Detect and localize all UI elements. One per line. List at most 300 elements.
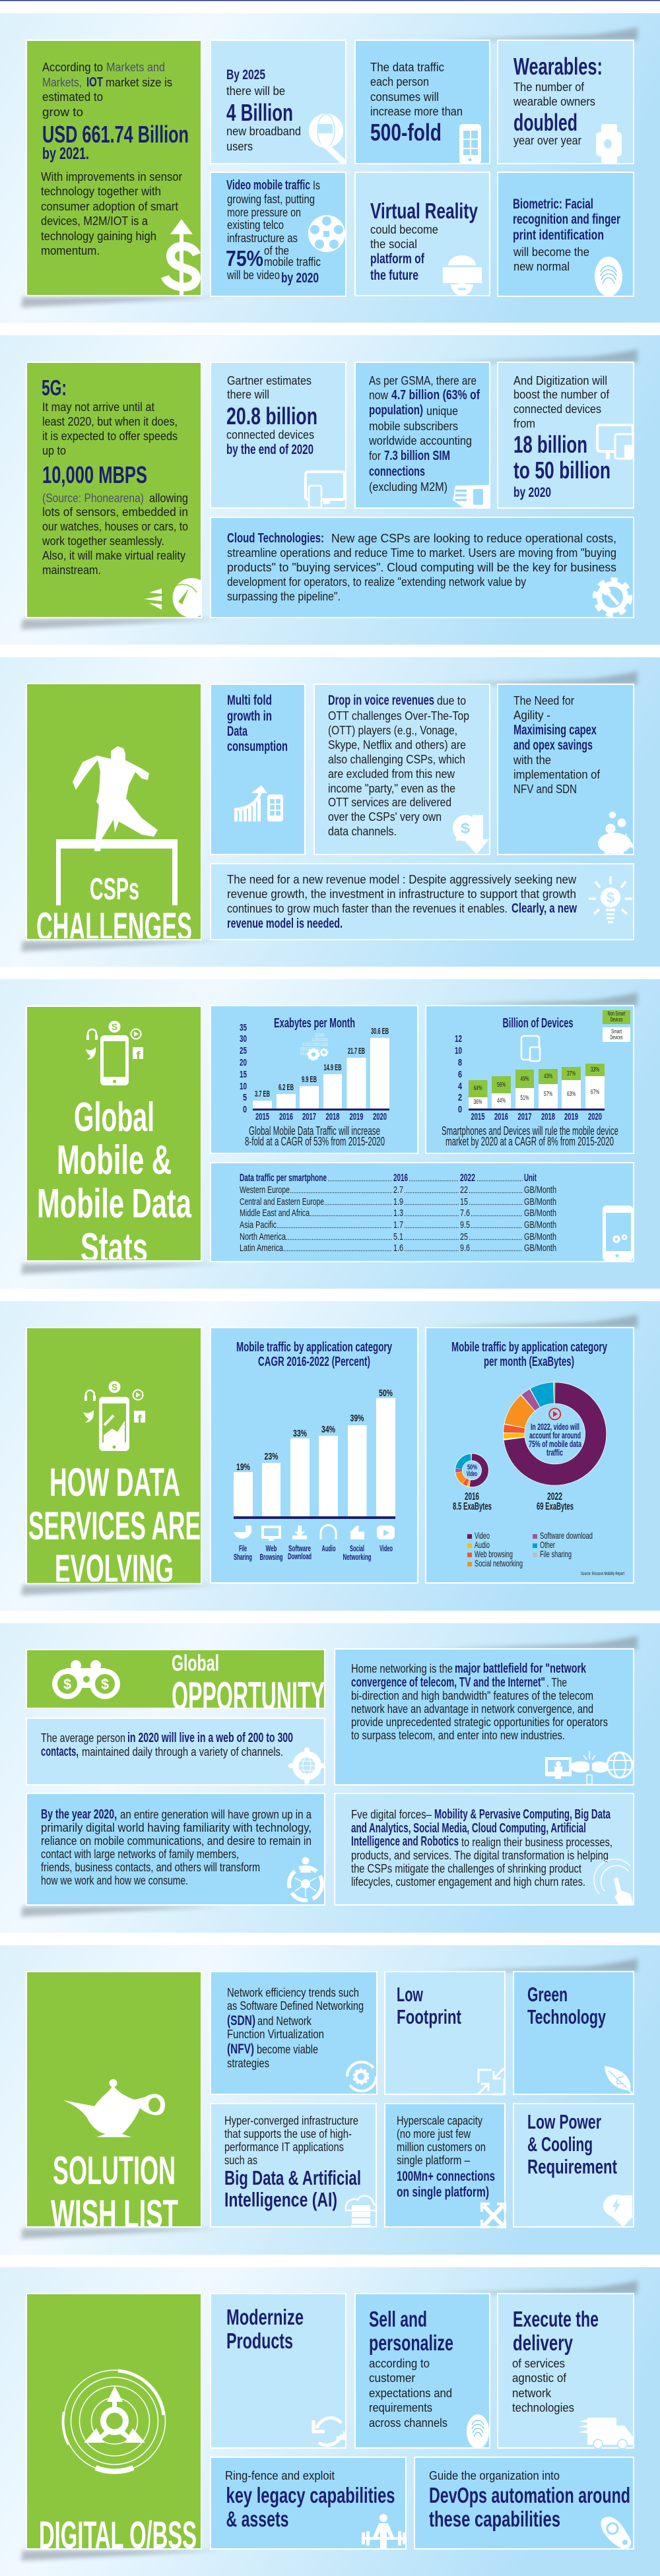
text: hyper-converged: Big Data & Artificial: [224, 2166, 361, 2189]
text: contacts: in 2020 will live in a web of 200 to 300: [127, 1731, 293, 1745]
chart: CAGR bars: 50%: [379, 1388, 393, 1399]
chart: 2016 donut: 50%: [467, 1464, 477, 1471]
icon: power down: [603, 2195, 634, 2227]
text: hyper-converged: performance IT applications: [224, 2141, 344, 2154]
text: contacts: [41, 1731, 293, 1759]
chart: devices stacked bars: 37%: [567, 1070, 576, 1078]
text: hyper-converged: [224, 2114, 361, 2211]
text: digitization: from: [513, 417, 535, 430]
text: Gartner: 20.8 billion: [226, 402, 317, 430]
panel: digitization: [498, 362, 634, 508]
text: digital forces: Fve digital forces–: [351, 1808, 432, 1821]
title: global mobile and mobile data stats: Mobile Data: [37, 1181, 191, 1227]
chart: devices stacked bars: 2017: [517, 1111, 532, 1122]
text: 5G: our watches, houses or cars, to: [42, 520, 188, 533]
text: digitization: to 50 billion: [513, 457, 610, 484]
text: agility: [513, 694, 601, 796]
text: donut labels: 69 ExaBytes: [537, 1501, 574, 1512]
text: digital forces: Intelligence and Robotics: [351, 1834, 459, 1849]
text: IoT market size: market size is: [106, 76, 172, 89]
text: data consumption: consumption: [227, 739, 288, 754]
table: data traffic per smartphone: [240, 1173, 556, 1254]
table: data traffic per smartphone: GB/Month: [524, 1196, 556, 1208]
panel: home networking: [335, 1649, 634, 1785]
text: agility: implementation of: [513, 768, 601, 781]
panel: hyperscale capacity: [385, 2104, 505, 2227]
text: devops: these capabilities: [429, 2507, 560, 2531]
chart: devices stacked bars: 64%: [474, 1085, 482, 1092]
text: GSMA: mobile subscribers: [369, 420, 458, 433]
text: digital forces: products, and services. The digital transformation is helping: [351, 1849, 609, 1862]
text: low power: Low Power: [527, 2110, 601, 2133]
panel: digital O/BSS title: [26, 2294, 201, 2557]
text: voice revenues: also challenging CSPs, which: [328, 753, 465, 766]
chart: devices stacked bars: 63%: [567, 1091, 576, 1098]
chart: exabytes bars: 2017: [302, 1111, 316, 1122]
chart: 2022 donut: account for around: [529, 1430, 581, 1440]
icon: delivery truck: [579, 2418, 634, 2449]
table: data traffic per smartphone: 2016: [393, 1173, 408, 1184]
legend: device types: Non Smart: [607, 1010, 626, 1017]
table: data traffic per smartphone: 9.5: [460, 1219, 470, 1231]
text: generation: [41, 1807, 312, 1887]
text: home networking: to surpass telecom, and enter into new industries.: [351, 1729, 565, 1742]
chart: CAGR bars: 33%: [293, 1428, 307, 1439]
text: revenue model: [227, 873, 577, 931]
text: data traffic: [370, 61, 463, 146]
text: category labels: Download: [288, 1551, 312, 1561]
text: network efficiency: as Software Defined Networking: [227, 1999, 364, 2012]
panel: GSMA subscribers: [355, 362, 490, 508]
text: CAGR chart title: CAGR 2016-2022 (Percent): [258, 1355, 370, 1369]
text: GSMA: 7.3 billion SIM: [384, 449, 450, 463]
text: GSMA: As per GSMA, there are: [369, 374, 477, 387]
title: how data services are evolving: [29, 1467, 200, 1582]
icon: binary gears: 11001100: [312, 1038, 328, 1043]
text: exabytes caption: Global Mobile Data Traffic will increase: [249, 1124, 380, 1138]
text: biometric: new normal: [513, 260, 570, 273]
icon: dollar with arrow: [165, 219, 197, 296]
text: GSMA: worldwide accounting: [368, 434, 472, 447]
text: generation: friends, business contacts, and others will transform: [41, 1861, 260, 1874]
legend: application categories: Video: [475, 1530, 490, 1541]
chart: devices stacked bars: 6: [458, 1069, 462, 1080]
text: video traffic: infrastructure as: [227, 232, 298, 245]
text: video traffic: 75%: [226, 246, 263, 271]
text: cloud technologies: surpassing the pipeline".: [227, 590, 341, 603]
text: biometric: Biometric: Facial: [513, 197, 593, 212]
text: voice revenues: Drop in voice revenues: [328, 693, 434, 708]
panel: exabytes per month: [211, 1006, 418, 1153]
text: revenue model: revenue model is needed.: [227, 917, 343, 931]
text: low footprint: Low: [397, 1983, 424, 2006]
text: hyperscale: single platform –: [397, 2154, 470, 2167]
text: IoT market size: USD 661.74 Billion: [42, 121, 189, 148]
table: data traffic per smartphone: Western Europe: [240, 1184, 290, 1196]
table: data traffic per smartphone: 1.7: [393, 1219, 403, 1231]
text: voice revenues: [328, 693, 469, 838]
table: data traffic per smartphone: GB/Month: [524, 1208, 556, 1219]
text: virtual reality: the future: [370, 268, 418, 283]
text: category labels: Web: [265, 1543, 277, 1553]
text: GSMA: (excluding M2M): [369, 480, 447, 494]
text: virtual reality: the social: [370, 238, 417, 251]
icon: devices: [597, 425, 633, 459]
text: category labels: Social: [350, 1543, 364, 1553]
panel: hyper-converged infrastructure: [211, 2104, 376, 2227]
table: data traffic per smartphone: 1.9: [393, 1196, 403, 1208]
text: voice revenues: Skype, Netflix and others) are: [328, 738, 466, 752]
text: exabytes caption: [245, 1124, 385, 1148]
text: category labels: File: [239, 1543, 247, 1553]
text: video traffic: growing fast, putting: [227, 193, 315, 206]
panel: new revenue model: [211, 864, 634, 940]
text: IoT market size: Markets,: [42, 76, 82, 89]
text: generation: an entire generation will have grown up in a: [120, 1808, 312, 1821]
text: IoT market size: estimated to: [42, 90, 103, 104]
title: global mobile and mobile data stats: Global: [74, 1095, 154, 1140]
text: legacy capabilities: [225, 2469, 395, 2531]
icon: expand arrows: [482, 2204, 505, 2227]
chart: CAGR bars: 19%: [236, 1462, 250, 1473]
text: IoT market size: grow to: [42, 106, 83, 119]
panel: Gartner estimates: [211, 362, 346, 508]
text: video traffic: of the: [264, 244, 289, 257]
text: digital forces: the CSPs mitigate the challenges of shrinking product: [351, 1862, 581, 1875]
title: solution wish list: WISH LIST: [51, 2192, 178, 2236]
text: 5G: 5G:: [42, 375, 67, 400]
text: biometric: [513, 197, 620, 273]
panel: solution wish list title: [26, 1972, 201, 2236]
chart: CAGR bars: 34%: [321, 1424, 335, 1435]
text: wearables: Wearables:: [513, 53, 603, 80]
panel: sell and personalize: [355, 2294, 490, 2449]
icon: binary gears: 0001000101: [300, 1047, 320, 1052]
table: data traffic per smartphone: 15: [460, 1196, 468, 1208]
text: IoT market size: momentum.: [41, 244, 100, 257]
legend: device types: Smart: [611, 1028, 622, 1035]
chart: exabytes bars: 0: [243, 1104, 247, 1115]
panel: need for agility: [498, 684, 634, 854]
text: data consumption: Data: [227, 724, 248, 739]
icon: binary gears: 11001: [315, 1033, 325, 1038]
table: data traffic per smartphone: 5.1: [393, 1231, 403, 1242]
icon: compress arrows: [478, 2068, 504, 2094]
icon: smart watch: [596, 124, 622, 164]
panel: legacy capabilities: [211, 2457, 406, 2549]
chart: devices stacked bars: 8: [458, 1057, 462, 1068]
icon: speedometer: [144, 578, 201, 618]
text: biometric: print identification: [513, 228, 604, 243]
chart: devices stacked bars: 56%: [497, 1081, 506, 1089]
text: low power: & Cooling: [527, 2133, 593, 2156]
table: data traffic per smartphone: Middle East and Africa: [240, 1208, 310, 1219]
panel: data consumption: [211, 684, 305, 854]
panel: drop in voice revenues: [314, 684, 490, 854]
text: cloud technologies: products" to "buying services". Cloud computing will be the key for business: [227, 561, 616, 574]
legend: application categories: File sharing: [540, 1549, 572, 1559]
panel: biometric: [498, 172, 634, 296]
text: execute: technologies: [512, 2401, 574, 2414]
panel: devops automation: [414, 2457, 634, 2549]
text: revenue model: The need for a new revenue model : Despite aggressively seeking new: [227, 873, 577, 886]
text: hyperscale: on single platform): [397, 2185, 489, 2200]
icon: magic lamp: [63, 2079, 165, 2137]
text: network efficiency: (SDN): [227, 2013, 255, 2028]
text: Gartner: by the end of 2020: [226, 442, 314, 457]
text: digitization: And Digitization will: [513, 374, 607, 387]
title: how data services are evolving: EVOLVING: [55, 1547, 174, 1591]
panel: modernize products: [211, 2294, 346, 2448]
icon: growth chart and phone: [234, 785, 283, 821]
text: virtual reality: Virtual Reality: [370, 199, 478, 223]
table: data traffic per smartphone: GB/Month: [524, 1242, 556, 1254]
text: video traffic: existing telco: [227, 218, 284, 232]
text: data traffic: The data traffic: [370, 61, 444, 74]
icon: phone with growth and social apps: [83, 1381, 145, 1451]
text: execute: delivery: [513, 2331, 573, 2355]
text: IoT market size: technology gaining high: [41, 230, 156, 243]
chart: exabytes bars: 20: [240, 1057, 247, 1068]
section: digital O/BSS: [26, 2294, 634, 2557]
text: revenue model: continues to grow much faster than the revenues it enables.: [227, 902, 508, 915]
text: hyper-converged: such as: [224, 2154, 257, 2167]
text: data traffic: increase more than: [370, 105, 463, 118]
icon: gear belt: [601, 2517, 631, 2549]
panel: 5G: [26, 362, 201, 618]
text: broadband users: users: [226, 140, 253, 153]
icon: VR headset: [443, 255, 482, 296]
text: network efficiency: (NFV): [227, 2042, 254, 2057]
table: data traffic per smartphone: 22: [460, 1184, 468, 1196]
chart: exabytes bars: 10: [240, 1081, 247, 1092]
panel: five digital forces: [335, 1793, 634, 1905]
text: GSMA: [368, 374, 480, 494]
icons: application categories: [234, 1526, 395, 1541]
text: sell and personalize: personalize: [369, 2331, 453, 2355]
text: revenue model: revenue growth, the investment in infrastructure to support that growth: [227, 887, 576, 901]
icon: TV meets globe: [545, 1751, 632, 1784]
text: video traffic: [226, 178, 321, 286]
text: execute: agnostic of: [512, 2371, 567, 2385]
title: how data services are evolving: HOW DATA: [50, 1460, 180, 1504]
icon: weightlifter: [362, 2514, 406, 2549]
panel: green technology: [513, 1972, 634, 2094]
text: GSMA: unique: [426, 404, 458, 418]
text: broadband users: 4 Billion: [226, 99, 293, 126]
chart: devices stacked bars: 2015: [471, 1111, 484, 1122]
chart: 2016 donut: Video: [467, 1470, 477, 1478]
text: category labels: Browsing: [260, 1552, 283, 1562]
chart: exabytes bars: 21.7 EB: [348, 1046, 365, 1056]
panel: global mobile title: [26, 1006, 201, 1271]
text: voice revenues: over the CSPs' very own: [328, 810, 442, 823]
text: 5G: it is expected to offer speeds: [42, 430, 178, 443]
chart: exabytes bars: 15: [240, 1069, 247, 1080]
text: broadband users: By 2025: [226, 67, 265, 82]
title: how data services are evolving: SERVICES ARE: [28, 1504, 201, 1548]
table: data traffic per smartphone: Central and Eastern Europe: [240, 1196, 324, 1208]
text: voice revenues: due to: [437, 694, 466, 707]
text: wearables: The number of: [513, 80, 585, 94]
text: low footprint: Footprint: [397, 2005, 461, 2028]
icon: connected globe: [288, 1747, 325, 1784]
text: Gartner: [226, 374, 317, 457]
icon: binary gears: 1100110011000: [302, 1043, 328, 1047]
chart: exabytes bars: 25: [240, 1045, 247, 1056]
chart: 2022 donut: traffic: [546, 1447, 563, 1458]
legend: application categories: Other: [540, 1539, 555, 1550]
text: sell and personalize: expectations and: [369, 2387, 452, 2400]
title: CSPs challenges: [37, 878, 191, 938]
text: home networking: Home networking is the: [351, 1662, 453, 1675]
text: IoT market size: [41, 61, 189, 257]
text: IoT market size: by 2021.: [42, 145, 89, 163]
text: network efficiency: become viable: [257, 2043, 318, 2056]
text: wearables: wearable owners: [513, 95, 595, 108]
table: data traffic per smartphone: 7.6: [460, 1208, 470, 1219]
chart: 2022 donut: [497, 1376, 612, 1491]
text: devops: [429, 2469, 630, 2531]
icon: piggy bank: [598, 812, 634, 854]
text: video traffic: Is: [313, 179, 320, 192]
text: voice revenues: OTT challenges Over-The-Top: [328, 709, 469, 723]
chart: exabytes bars: 5: [243, 1092, 247, 1103]
text: IoT market size: IOT: [86, 75, 103, 90]
text: 5G: 10,000 MBPS: [42, 461, 147, 488]
icon: gear with cycle arrows: [347, 2062, 376, 2091]
text: hyper-converged: that supports the use of high-: [224, 2127, 352, 2141]
text: sell and personalize: [369, 2307, 453, 2430]
icon: recycle arrows: [314, 2418, 345, 2445]
chart: 2022 donut: In 2022, video will: [531, 1421, 579, 1432]
text: Gartner: there will: [227, 388, 269, 401]
icon: fingerprint: [467, 2414, 489, 2449]
text: sell and personalize: requirements: [369, 2401, 432, 2414]
chart: exabytes bars: 6.2 EB: [279, 1082, 294, 1092]
table: data traffic per smartphone: 9.6: [460, 1242, 470, 1254]
panel: mobile traffic per month: [426, 1328, 634, 1583]
panel: network efficiency: [211, 1972, 377, 2094]
text: contacts: contacts,: [41, 1745, 79, 1759]
text: hyperscale: Hyperscale capacity: [397, 2114, 482, 2127]
text: biometric: recognition and finger: [513, 212, 620, 227]
text: execute: network: [512, 2387, 552, 2400]
text: data traffic: consumes will: [370, 90, 439, 104]
chart: exabytes bars: 3.7 EB: [255, 1089, 270, 1099]
panel: global opportunity banner: [26, 1649, 325, 1709]
text: green technology: Green: [527, 1983, 568, 2006]
text: IoT market size: Markets and: [106, 61, 165, 74]
title: solution wish list: SOLUTION: [53, 2148, 176, 2193]
panel: low power and cooling: [513, 2104, 634, 2227]
title: global mobile and mobile data stats: Stats: [81, 1225, 148, 1271]
text: sell and personalize: Sell and: [369, 2307, 427, 2331]
text: donut labels: [453, 1491, 574, 1512]
text: voice revenues: data channels.: [328, 825, 397, 838]
chart: exabytes bars: [240, 1022, 389, 1122]
title: global opportunity: Global: [172, 1651, 219, 1676]
table: data traffic per smartphone: GB/Month: [524, 1184, 556, 1196]
chart: devices stacked bars: 0: [458, 1104, 462, 1115]
icon: monitor and phone: [306, 472, 345, 507]
section: IoT market and trends: [26, 40, 634, 296]
text: hyperscale: [397, 2114, 495, 2200]
chart: devices stacked bars: 2: [458, 1092, 462, 1103]
legend: device types: Devices: [610, 1016, 623, 1023]
chart: CAGR bars: 39%: [350, 1413, 364, 1424]
text: category labels: Audio: [322, 1543, 336, 1553]
text: biometric: will become the: [513, 245, 589, 259]
text: cloud technologies: streamline operations and reduce Time to market. Users are moving from "buying: [227, 546, 616, 560]
panel: CSPs challenges title: [26, 684, 201, 949]
title: digital O/BSS: DIGITAL O/BSS: [39, 2514, 197, 2557]
text: legacy capabilities: key legacy capabilities: [226, 2483, 395, 2507]
text: GSMA: now: [369, 389, 389, 402]
text: network efficiency: and Network: [257, 2014, 312, 2028]
text: digitization: 18 billion: [513, 431, 587, 458]
legend: application categories: Social networking: [475, 1558, 523, 1568]
icon: document and phone: [453, 485, 489, 508]
text: category labels: Sharing: [234, 1552, 252, 1562]
chart: exabytes bars: 2019: [350, 1111, 363, 1122]
icon: phone with growth and social apps: S: [112, 1382, 117, 1392]
table: data traffic per smartphone: 1.6: [393, 1242, 403, 1254]
text: hyper-converged: Hyper-converged infrastructure: [224, 2114, 358, 2127]
text: video traffic: more pressure on: [227, 206, 301, 219]
panel: generation by 2020: [26, 1793, 325, 1905]
icon: people network: [289, 1857, 322, 1900]
text: GSMA: 4.7 billion (63% of: [391, 388, 480, 402]
text: 5G: allowing: [149, 492, 188, 505]
text: cloud technologies: development for operators, to realize "extending network value by: [227, 575, 526, 589]
icon: leaf: [605, 2066, 634, 2094]
table: data traffic per smartphone: Data traffic per smartphone: [240, 1173, 327, 1184]
text: network efficiency: Network efficiency trends such: [227, 1986, 359, 1999]
section: CSPs challenges: [26, 684, 634, 949]
text: wearables: doubled: [513, 109, 578, 136]
text: home networking: convergence of telecom, TV and the Internet": [351, 1675, 545, 1690]
section: how data services are evolving: [26, 1328, 634, 1591]
chart: exabytes bars: 2020: [373, 1111, 387, 1122]
icon: touch rings: [594, 1859, 634, 1905]
section: solution wish list: [26, 1972, 634, 2236]
text: donut labels: 2022: [547, 1491, 562, 1502]
text: digital forces: to realign their business processes,: [461, 1836, 612, 1849]
table: data traffic per smartphone: GB/Month: [524, 1219, 556, 1231]
chart: devices stacked bars: 2016: [494, 1111, 508, 1122]
text: category labels: Networking: [343, 1552, 372, 1562]
text: video traffic: Video mobile traffic: [226, 178, 310, 193]
title: CSPs challenges: CSPs: [90, 872, 139, 906]
text: devices chart title: Billion of Devices: [503, 1016, 573, 1031]
text: green technology: Technology: [527, 2005, 607, 2028]
text: devops: Guide the organization into: [429, 2469, 560, 2482]
text: sell and personalize: across channels: [369, 2416, 447, 2430]
title: global mobile and mobile data stats: Mobile &: [57, 1138, 172, 1183]
text: data consumption: [227, 693, 288, 754]
chart: devices stacked bars: 12: [455, 1033, 462, 1045]
text: GSMA: for: [369, 449, 381, 463]
text: virtual reality: could become: [370, 223, 438, 236]
text: chart title: Exabytes per Month: [274, 1016, 355, 1031]
text: donut chart title: per month (ExaBytes): [484, 1355, 574, 1369]
icon: binary gears: 0110: [300, 1052, 308, 1056]
chart: devices stacked bars: 33%: [591, 1066, 599, 1074]
text: generation: how we work and how we consume.: [41, 1874, 188, 1887]
text: voice revenues: income "party," even as the: [328, 782, 455, 795]
title: global mobile and mobile data stats: [38, 1101, 191, 1260]
